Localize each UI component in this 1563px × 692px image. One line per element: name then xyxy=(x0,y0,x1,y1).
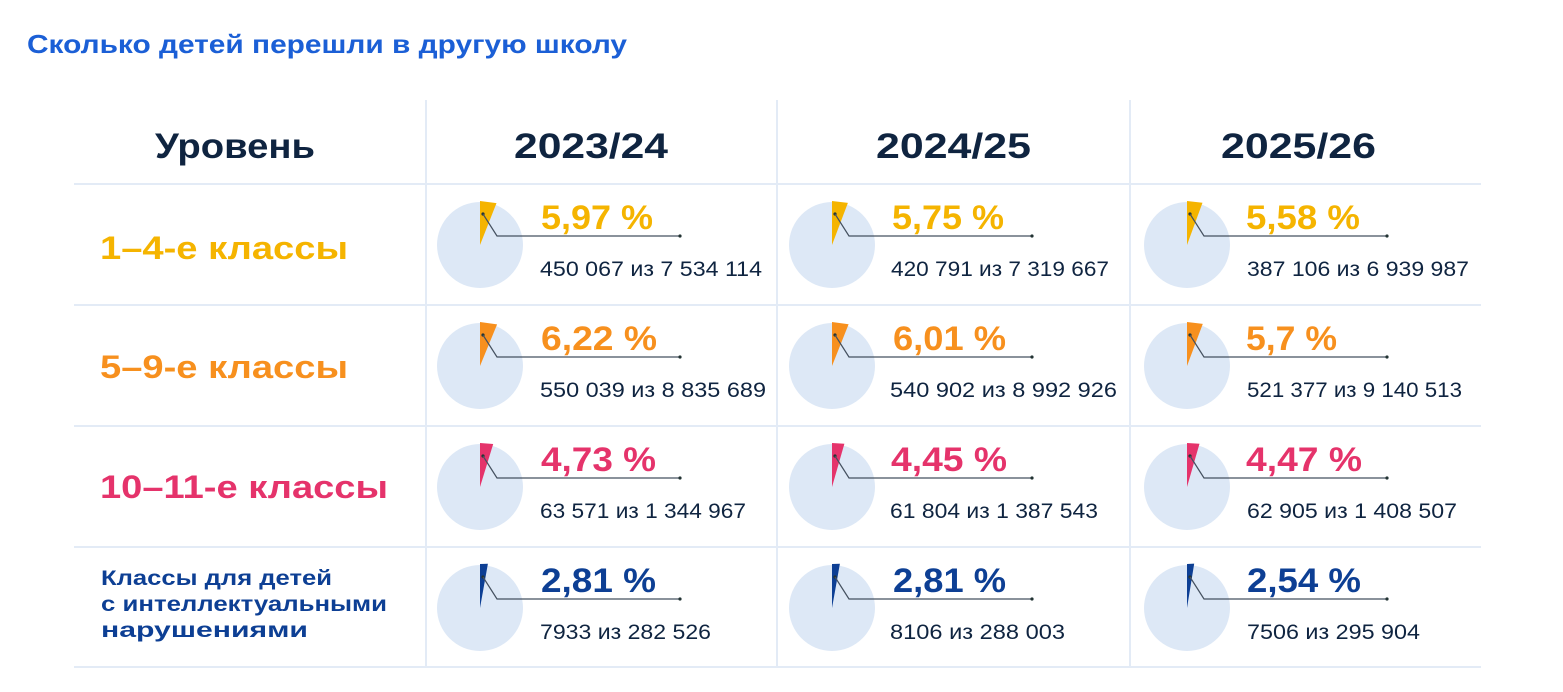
row labels: с интеллектуальными xyxy=(101,593,387,616)
row 4: 2,81 % xyxy=(541,562,656,600)
row 1: 5,97 % xyxy=(541,199,653,237)
cells: 540 902 из 8 992 926 xyxy=(890,379,1117,402)
title: Сколько детей перешли в другую школу xyxy=(27,29,628,59)
cells: 7506 из 295 904 xyxy=(1247,621,1420,644)
row labels: 5–9-е классы xyxy=(100,349,348,385)
row 2: 550 039 из 8 835 689 xyxy=(540,379,766,402)
row 2 xyxy=(437,320,766,409)
row labels: нарушениями xyxy=(101,619,308,642)
cells: 5,75 % xyxy=(892,199,1004,237)
row 1 xyxy=(437,199,762,288)
cells: 5,7 % xyxy=(1246,320,1337,358)
row 4: 7933 из 282 526 xyxy=(540,621,711,644)
row 3: 63 571 из 1 344 967 xyxy=(540,500,746,523)
row 2: 6,22 % xyxy=(541,320,657,358)
header row: 2024/25 xyxy=(876,127,1031,166)
cells: 61 804 из 1 387 543 xyxy=(890,500,1098,523)
row labels xyxy=(100,230,388,642)
cells: 2,81 % xyxy=(893,562,1006,600)
cells xyxy=(437,199,1469,651)
row 1: 450 067 из 7 534 114 xyxy=(540,258,762,281)
header row: 2025/26 xyxy=(1221,127,1376,166)
cells: 8106 из 288 003 xyxy=(890,621,1065,644)
cells: 5,58 % xyxy=(1246,199,1360,237)
row 4 xyxy=(437,562,711,651)
cells: 2,54 % xyxy=(1247,562,1361,600)
cells: 521 377 из 9 140 513 xyxy=(1247,379,1462,402)
cells: 4,47 % xyxy=(1246,441,1362,479)
row 3 xyxy=(437,441,746,530)
header row: 2023/24 xyxy=(514,127,669,166)
table grid xyxy=(74,100,1481,667)
cells: 4,45 % xyxy=(891,441,1007,479)
header row: Уровень xyxy=(155,127,315,166)
header row xyxy=(155,127,1376,166)
row 3: 4,73 % xyxy=(541,441,656,479)
row labels: Классы для детей xyxy=(101,567,332,590)
cells: 387 106 из 6 939 987 xyxy=(1247,258,1469,281)
row labels: 1–4-е классы xyxy=(100,230,348,266)
cells: 6,01 % xyxy=(893,320,1006,358)
cells: 420 791 из 7 319 667 xyxy=(891,258,1109,281)
cells: 62 905 из 1 408 507 xyxy=(1247,500,1457,523)
row labels: 10–11-е классы xyxy=(100,469,388,505)
